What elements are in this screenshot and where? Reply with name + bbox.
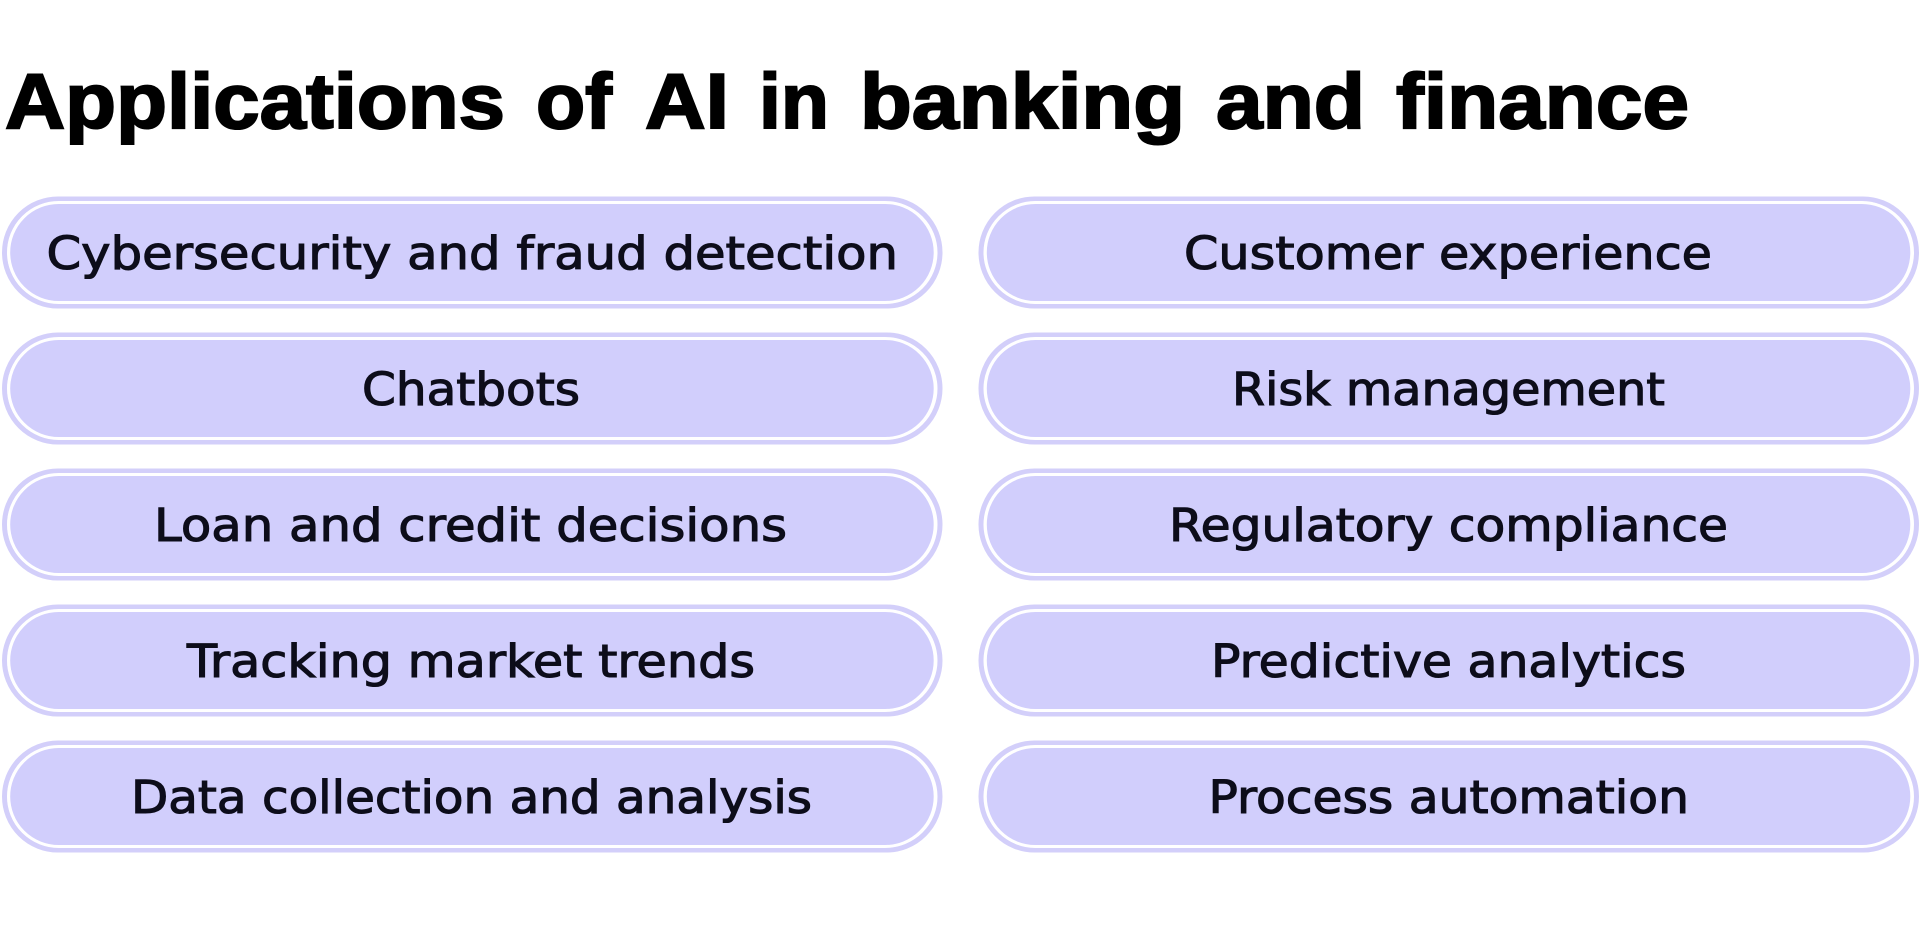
pill: Process automation (981, 743, 1916, 850)
pill: Regulatory compliance (981, 471, 1916, 578)
pill: Data collection and analysis (4, 743, 940, 850)
pill: Chatbots (4, 335, 940, 442)
left column of pills (4, 199, 940, 850)
title: AI (645, 57, 729, 145)
pill: Risk management: Risk management (1232, 363, 1665, 416)
pill: Customer experience (981, 199, 1916, 306)
right column of pills (981, 199, 1916, 850)
pill: Loan and credit decisions: Loan and credit decisions (154, 499, 787, 552)
pill: Chatbots: Chatbots (362, 363, 580, 416)
title: in (759, 57, 829, 145)
title: of (536, 57, 613, 145)
pill: Process automation: Process automation (1208, 771, 1689, 824)
pill: Predictive analytics: Predictive analytics (1211, 635, 1686, 688)
title: finance (1396, 57, 1689, 145)
pill: Loan and credit decisions (4, 471, 940, 578)
pill: Cybersecurity and fraud detection: Cybersecurity and fraud detection (46, 227, 898, 280)
pill: Data collection and analysis: Data collection and analysis (131, 771, 812, 824)
pill: Cybersecurity and fraud detection (4, 199, 940, 306)
title: and (1216, 57, 1365, 145)
pill: Customer experience: Customer experience (1184, 227, 1712, 280)
pill: Tracking market trends: Tracking market trends (186, 635, 755, 688)
title (5, 57, 1689, 145)
title: Applications (5, 57, 505, 145)
title: banking (860, 57, 1185, 145)
pill: Tracking market trends (4, 607, 940, 714)
pill: Predictive analytics (981, 607, 1916, 714)
pill: Regulatory compliance: Regulatory compliance (1169, 499, 1728, 552)
pill: Risk management (981, 335, 1916, 442)
